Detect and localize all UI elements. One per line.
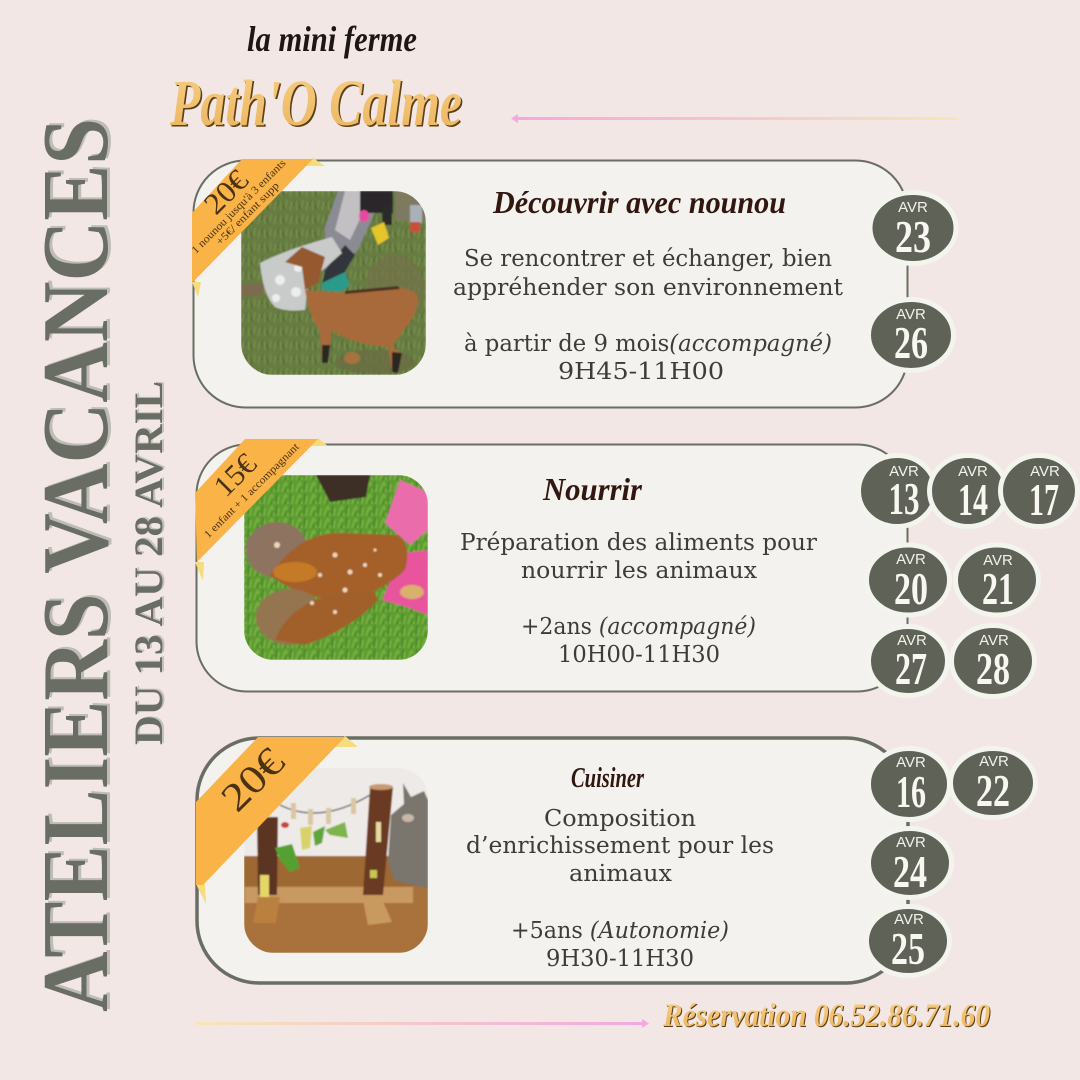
price ribbon: 20€: 20€ [198,164,255,221]
description: Composition [544,806,696,832]
arrow: bottom [195,1019,649,1028]
description [466,806,774,887]
date badge: AVR 14: AVR [958,463,988,480]
date badge: AVR 23 [870,192,956,264]
vertical subtitle: dates: DU 13 AU 28 AVRIL [126,381,171,745]
title: Path'O Calme: Path'O Calme [171,68,464,142]
date badge: AVR 13: AVR [889,463,919,480]
date badge: AVR 27: 27 [895,643,927,694]
price ribbon: 20€: +5€/ enfant supp [214,180,282,248]
date badge: AVR 24: 24 [893,846,927,897]
date badge: AVR 17: 17 [1029,474,1059,525]
panel: Cuisiner [196,736,908,983]
heading: Cuisiner [571,762,644,794]
date badge: AVR 25: AVR [894,911,924,928]
description [460,530,817,584]
photo: hens on the grass [244,475,428,660]
date badge: AVR 26: AVR [896,306,926,323]
date badge: AVR 22: 22 [976,765,1010,816]
photo: rabbit and hanging-food frame [244,768,428,953]
date badge: AVR 28: AVR [979,632,1009,649]
date badge: AVR 23: AVR [898,199,928,216]
date badge: AVR 13: 13 [888,473,920,524]
price ribbon: 20€ [189,157,325,297]
description: Préparation des aliments pour [460,530,817,556]
reservation phone number: Réservation 06.52.86.71.60 [663,999,991,1035]
age and schedule: 10H00-11H30 [558,642,720,668]
heading: Découvrir avec nounou [492,184,786,220]
vertical title: ATELIERS VACANCES: ATELIERS VACANCES [24,118,128,1012]
description: animaux [569,861,672,887]
date badge: AVR 21: AVR [983,552,1013,569]
date badge: AVR 26 [868,300,954,370]
reservation phone number: Réservation 06.52.86.71.60 [662,998,990,1034]
date badge: AVR 20: 20 [894,563,928,614]
description [453,246,844,301]
panel: Découvrir avec nounou [189,157,907,408]
date badge: AVR 22: AVR [979,753,1009,770]
date badge: AVR 25: 25 [891,923,925,974]
date badge: AVR 16 [868,748,950,820]
age and schedule: +2ans (accompagné) [521,614,756,640]
date badge: AVR 21 [956,545,1038,615]
date badge: AVR 20 [866,545,950,615]
age and schedule [521,614,756,668]
price ribbon: 15€: 15€ [207,447,263,503]
date badge: AVR 27: AVR [897,632,927,649]
description: nourrir les animaux [521,558,757,584]
price ribbon: 20€ [196,736,358,904]
price ribbon: 15€ [195,438,328,581]
description: appréhender son environnement [453,275,844,301]
description: d’enrichissement pour les [466,833,774,859]
date badge: AVR 24 [868,828,952,898]
date badge: AVR 17 [1000,456,1078,526]
age and schedule: +5ans (Autonomie) [511,918,729,944]
photo: goat and stroller [241,191,426,375]
description: Se rencontrer et échanger, bien [464,246,832,272]
date badge: AVR 28 [952,626,1034,696]
date badge: AVR 23: 23 [895,211,931,262]
title: la mini ferme: la mini ferme [247,19,417,59]
vertical subtitle: dates: DU 13 AU 28 AVRIL [128,380,173,744]
panel: Nourrir [195,438,908,692]
price ribbon: 20€: 1 nounou jusqu'à 3 enfants [189,157,288,256]
date badge: AVR 27 [868,626,948,696]
age and schedule: à partir de 9 mois(accompagné) [464,331,832,357]
age and schedule [464,331,832,385]
date badge: AVR 20: AVR [896,551,926,568]
date badge: AVR 28: 28 [976,643,1010,694]
age and schedule: 9H30-11H30 [546,946,694,972]
date badge: AVR 22 [950,748,1036,818]
date badge: AVR 14: 14 [958,474,988,525]
age and schedule [511,918,729,972]
vertical title: ATELIERS VACANCES: ATELIERS VACANCES [27,116,131,1010]
date badge: AVR 16: 16 [896,766,926,817]
price ribbon: 20€: 20€ [212,739,293,820]
date badge: AVR 16: AVR [896,754,926,771]
date badge: AVR 26: 26 [894,317,928,368]
title: Path'O Calme: Path'O Calme [169,67,462,140]
date badge: AVR 21: 21 [982,563,1014,614]
arrow: top [511,114,958,123]
age and schedule: 9H45-11H00 [558,359,724,385]
date badge: AVR 24: AVR [896,834,926,851]
date badge: AVR 13 [858,456,936,526]
price ribbon: 15€: 1 enfant + 1 accompagnant [202,441,302,541]
date badge: AVR 17: AVR [1030,463,1060,480]
date badge: AVR 25 [866,906,950,976]
heading: Nourrir [542,471,643,507]
date badge: AVR 14 [930,456,1006,526]
